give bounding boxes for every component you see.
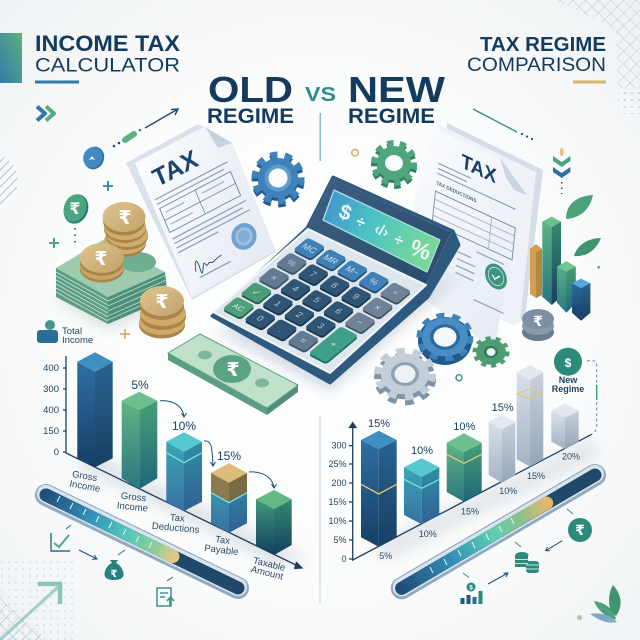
percent labels: 10% <box>172 419 196 433</box>
keypad: ÷ <box>389 288 401 297</box>
illustration: silver coins <box>522 309 554 341</box>
category labels: Taxable <box>252 555 286 574</box>
icon: check chart <box>51 525 71 551</box>
divider <box>320 416 321 603</box>
illustration: right tax document <box>402 122 543 355</box>
axis labels: 0 <box>54 447 59 458</box>
keypad: 8 <box>329 281 341 290</box>
legend: new regime <box>552 348 597 434</box>
heading: tax regime comparison: TAX REGIME <box>480 34 606 56</box>
axis labels: 10% <box>328 516 346 526</box>
icon: blue badge <box>80 144 107 172</box>
icon: gray gear <box>378 351 432 402</box>
axis labels: 15% <box>328 497 346 507</box>
illustration: banknote front: ₹ <box>226 360 240 381</box>
keypad: = <box>297 336 309 345</box>
axes <box>349 423 592 560</box>
axis labels <box>43 363 59 458</box>
icon: rupee circle <box>567 509 592 542</box>
bar 1 <box>361 431 397 547</box>
bar 2 <box>404 458 439 524</box>
arrow: chart to coins <box>488 573 508 584</box>
illustration: banknote front <box>168 334 298 415</box>
heading: tax regime comparison: COMPARISON <box>467 55 606 76</box>
icon: chevrons and dots top right <box>553 148 570 194</box>
screen symbols <box>336 200 435 265</box>
icon: money bag <box>104 550 125 580</box>
axes <box>63 356 302 568</box>
illustration: banknote stack <box>56 240 172 330</box>
bar: tax deductions <box>166 432 202 511</box>
keypad: × <box>268 273 280 282</box>
title: old vs new regime: VS <box>305 84 336 106</box>
title: old vs new regime: NEW <box>348 69 445 110</box>
category labels: Income <box>116 500 148 515</box>
axis labels: 300 <box>43 384 59 395</box>
bottom percent labels <box>379 452 580 561</box>
coin stack middle: ₹ <box>94 249 108 270</box>
icon: money bag: ₹ <box>111 569 118 580</box>
category labels: Tax <box>170 512 185 525</box>
icon: double chevrons <box>37 106 54 120</box>
icon: green rupee coin <box>60 191 92 227</box>
top percent labels <box>368 402 514 457</box>
percent labels: 15% <box>217 449 241 463</box>
signature <box>192 249 224 275</box>
keypad: 6 <box>332 307 345 315</box>
keypad: 7 <box>307 270 319 279</box>
illustration: coin stacks <box>80 202 186 338</box>
icon: green plus <box>49 238 59 248</box>
icon: gold plus <box>120 329 130 339</box>
keypad: × <box>371 303 384 312</box>
keypad: % <box>366 277 381 287</box>
bar 4 <box>489 415 515 483</box>
keypad: 3 <box>315 321 327 330</box>
progress bar: right slider <box>402 474 595 588</box>
illustration: calculator <box>212 177 465 392</box>
keypad: ✓ <box>249 288 264 297</box>
legend: new regime: $ <box>565 356 572 370</box>
calculator screen <box>323 190 440 272</box>
arrow: dotted diagonal up <box>113 109 178 147</box>
chart: left income bars <box>43 352 310 583</box>
illustration: left tax document <box>126 118 278 300</box>
icon: leaves bottom right <box>590 585 621 623</box>
chart: right regime bars <box>328 365 600 564</box>
screen symbols: % <box>407 234 435 265</box>
coin stack upper: ₹ <box>118 208 132 229</box>
screen symbols: ÷ <box>392 231 406 250</box>
heading: income tax calculator <box>35 31 180 84</box>
legend: total income: Income <box>62 335 93 346</box>
title: old vs new regime: REGIME <box>348 105 435 128</box>
arrow: check to money bag <box>79 550 97 559</box>
axis labels: 400 <box>43 363 59 374</box>
accent square <box>0 33 22 83</box>
heading: income tax calculator: INCOME TAX <box>35 31 180 56</box>
screen symbols: ‹/› <box>372 220 391 241</box>
icon: green rupee coin: ₹ <box>69 201 81 218</box>
bar: gross income 2 <box>122 392 157 489</box>
icon: clipboard <box>157 577 174 606</box>
decorative pattern: left hatch <box>0 154 18 206</box>
category labels: Payable <box>204 543 239 558</box>
category labels: Gross <box>71 469 98 484</box>
keypad: − <box>354 318 366 327</box>
icon: rupee circle: ₹ <box>575 522 585 538</box>
legend: total income <box>37 320 93 346</box>
top percent labels: 15% <box>368 418 390 430</box>
text: tax deductions: TAX DEDUCTIONS <box>436 180 477 205</box>
legend: new regime: New <box>559 375 578 385</box>
screen symbols: ÷ <box>354 213 368 232</box>
icon: leaves right <box>566 195 601 269</box>
arrow: teal line with dots <box>473 109 533 140</box>
bottom percent labels: 20% <box>562 452 580 462</box>
decorative pattern: bottom left grid and dots <box>0 556 74 640</box>
axis labels <box>328 440 346 564</box>
axis labels: 5% <box>333 535 346 545</box>
calculator body <box>212 177 459 383</box>
percent labels: 5% <box>131 378 149 392</box>
heading: tax regime comparison <box>467 34 606 84</box>
icon: green gear <box>374 144 414 186</box>
bottom percent labels: 10% <box>499 486 517 496</box>
axis labels: 150 <box>43 426 59 437</box>
keypad: MC <box>299 242 320 255</box>
axis labels: 300 <box>331 440 346 450</box>
text: TAX heading: TAX <box>460 150 498 189</box>
bar 3 <box>447 433 482 502</box>
bottom percent labels: 10% <box>419 529 437 539</box>
keypad: 1 <box>272 299 284 308</box>
axis labels: 25% <box>328 459 346 469</box>
bar 6 <box>551 403 579 449</box>
percent labels <box>131 378 241 463</box>
category labels <box>69 469 287 583</box>
icon: teal plus <box>103 181 113 191</box>
axis labels: 0 <box>341 554 346 564</box>
arrow: rupee to coins <box>546 541 562 551</box>
axis labels: 400 <box>43 405 59 416</box>
text: TAX stamp heading: TAX <box>149 145 202 193</box>
category labels: Tax <box>215 534 231 547</box>
bar: taxable amount <box>256 490 292 555</box>
icon: blue flat gear <box>418 316 472 365</box>
icon: gold ring <box>352 149 358 156</box>
keypad: . <box>277 326 287 333</box>
keypad: 9 <box>350 292 362 301</box>
key panel <box>213 229 426 373</box>
keypad <box>221 238 413 364</box>
heading: income tax calculator: CALCULATOR <box>35 56 180 76</box>
icon: small coin dot <box>577 615 582 620</box>
bar: tax payable <box>211 463 247 533</box>
category labels: Amount <box>250 564 284 583</box>
keypad: 4 <box>289 285 302 293</box>
screen symbols: $ <box>336 200 355 226</box>
keypad: % <box>284 258 299 268</box>
keypad: 2 <box>293 310 305 319</box>
small bar chart top right <box>530 217 590 321</box>
top percent labels: 10% <box>453 421 476 433</box>
axis labels: 200 <box>331 478 346 488</box>
keypad: + <box>327 340 340 349</box>
title: old vs new regime: REGIME <box>207 105 294 128</box>
category labels: Deductions <box>151 521 200 536</box>
bottom percent labels: 5% <box>379 551 392 561</box>
keypad: 5 <box>311 296 323 304</box>
flow arrows <box>160 401 276 488</box>
icon: blue gear <box>256 156 300 204</box>
category labels: Income <box>69 479 101 495</box>
icon: chart with dollar: $ <box>469 584 473 592</box>
icon: small green gear <box>475 338 507 366</box>
top percent labels: 15% <box>492 402 514 414</box>
progress bar: left slider <box>46 494 238 588</box>
bottom percent labels: 15% <box>527 471 545 481</box>
keypad: M− <box>343 264 362 277</box>
arrow: light teal growth arrow <box>0 584 60 640</box>
keypad: 0 <box>254 314 266 323</box>
top percent labels: 10% <box>411 445 433 457</box>
category labels: Gross <box>120 491 147 504</box>
title: old vs new regime <box>207 69 445 161</box>
title: old vs new regime: OLD <box>208 69 293 110</box>
illustration: silver coins: ₹ <box>533 313 543 329</box>
connector dots <box>74 228 76 246</box>
keypad: MR <box>321 253 341 266</box>
legend: new regime: Regime <box>552 384 584 394</box>
keypad: AC <box>230 302 247 313</box>
bar 5 <box>517 365 543 467</box>
icon: coin stacks green <box>515 542 539 573</box>
icon: teal ring <box>456 375 462 381</box>
coin stack lower: ₹ <box>155 292 169 313</box>
decorative pattern: top right lattice <box>555 0 640 114</box>
legend: total income: Total <box>62 326 82 337</box>
icon: chart with dollar <box>460 573 482 604</box>
icon: seal <box>227 218 260 254</box>
bar: gross income 1 <box>77 352 113 467</box>
bottom percent labels: 15% <box>461 507 479 517</box>
icon: green seal <box>484 260 508 293</box>
